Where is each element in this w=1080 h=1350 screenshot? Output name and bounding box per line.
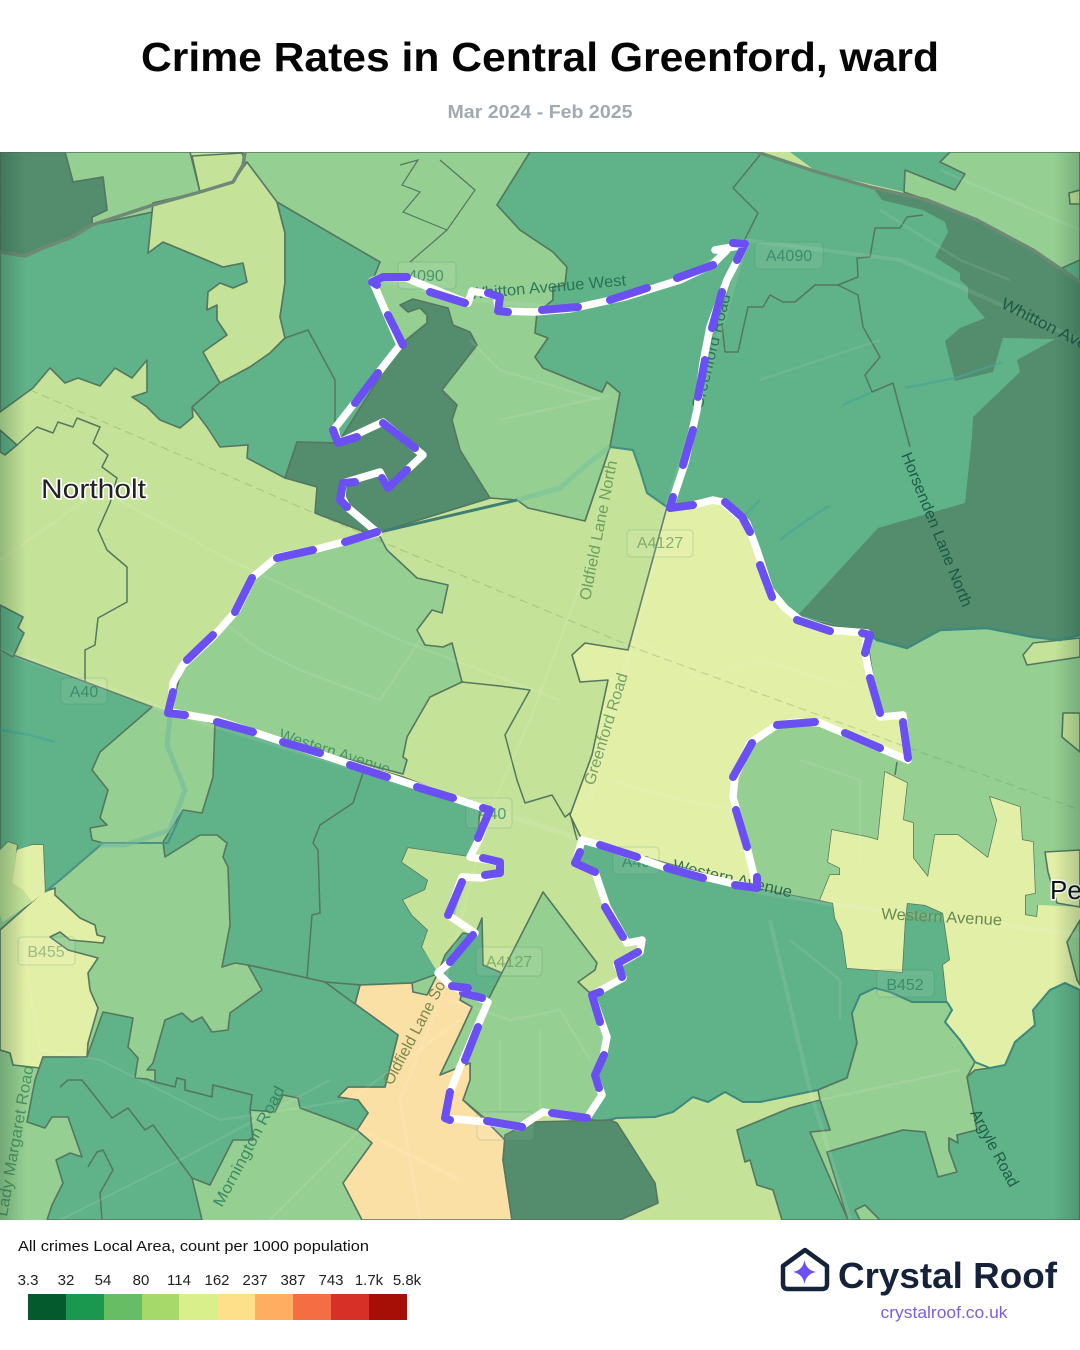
area: mid green lower-left [27,1012,253,1220]
streams [0,362,1003,742]
road labels: Horsenden Lane North [897,450,975,609]
river along the south-east [600,1013,857,1122]
area: light green south-east [810,988,977,1220]
label: A40 east [613,847,659,874]
label: B452 [877,970,934,997]
road labels: Argyle Road [966,1107,1021,1190]
area: light green west of Greenford, inside ward [170,533,462,774]
label: A4127 north: A4127 [637,535,683,552]
area: pale yellow Perivale east [1045,850,1080,907]
legend values [18,1272,422,1289]
area: north-west light green [65,152,200,225]
area: A40 south-west mid green [0,678,460,1220]
brand logo [783,1250,1058,1322]
place label: Northolt: Northolt [41,474,147,504]
area: pale yellow B455 [0,888,105,1068]
road labels [0,272,1080,1218]
area: left mid green south of A40 [0,650,152,892]
area: top-right light green [903,152,1080,268]
label: A4090 west: 4090 [408,268,444,285]
north-west canal edge [45,810,183,892]
area: north-east mid green [497,152,1080,648]
road labels: Greenford Road [582,671,632,787]
area: north mid green, west of ward [192,202,403,478]
area: mid green south-east corner [827,983,1080,1220]
area: top yellow patch [192,153,245,192]
legend colour ramp [28,1294,407,1320]
area: small green wedge at right edge [1062,260,1080,282]
label: A4127 south: A4127 [486,954,532,971]
label: A40 centre [466,798,512,828]
river north of Perivale [867,628,1080,648]
choropleth map [0,152,1080,1220]
label: A40 centre: A40 [478,806,506,823]
area: orange town centre [338,973,512,1220]
area: darkest north-east park [798,188,1080,648]
legend values: 237 [242,1272,268,1289]
label: A4127 south [476,947,542,976]
website: crystalroof.co.uk [880,1304,1008,1322]
area: small yellow top-right [1069,190,1080,204]
road labels: Mornington Road [211,1084,288,1210]
area: yellow-green strip at east [1023,638,1080,665]
label: A40 west: A40 [70,684,98,701]
canal [100,715,185,845]
ward boundary: white base [170,245,908,1127]
area: top right band [790,152,965,192]
ward boundary: purple dashes [168,243,908,1127]
icon: house with sparkle [783,1250,827,1289]
edge vignette [0,152,1080,1220]
area: north-west mid green [0,212,247,428]
area: light green sliver at east edge [1067,920,1080,985]
railway line [30,390,1080,810]
area: darkest south [503,1120,658,1220]
area: north-west yellow-green [148,162,285,383]
river on the east side [945,983,1080,1068]
legend values: 162 [204,1272,230,1289]
wordmark: Crystal Roof [838,1255,1058,1296]
label: A4090 east: A4090 [766,248,812,265]
label: A40 west [61,678,107,704]
area: small green by A4127 [438,918,502,1002]
lines: north-east ward boundaries [380,155,923,650]
label: A4090 west [398,262,456,289]
area: east light green [733,628,1080,917]
label: B455: B455 [27,944,65,961]
road labels: Oldfield Lane So [381,978,450,1088]
area: pale yellow top left [12,845,45,902]
label: A4090 east [755,242,823,269]
road labels: Western Avenue [881,906,1003,929]
label: B452: B452 [886,977,924,994]
legend values: 32 [58,1272,74,1289]
line: central ward boundary [462,682,577,840]
road labels: Western Avenue [277,727,392,779]
legend values: 743 [318,1272,344,1289]
legend values: 5.8k [393,1272,422,1289]
area: dark green ward north [285,299,490,533]
legend values: 114 [167,1272,191,1289]
legend values: 54 [95,1272,111,1289]
area: small green at west edge [0,430,17,455]
legend [18,1238,422,1320]
road labels: Western Avenue [671,857,794,901]
legend values: 387 [280,1272,306,1289]
area: east large mid green [575,840,950,1122]
road labels: Oldfield Lane North [577,459,621,602]
area: mid green south of Western Avenue [163,723,480,985]
area: mid green south-west band [147,965,398,1130]
label: B road south [477,1112,534,1140]
area: pale yellow Perivale [820,772,1080,1068]
legend values: 3.3 [18,1272,38,1289]
area: north light green [190,152,620,532]
area: central pale yellow [570,498,908,888]
road network [0,170,1080,1220]
legend values: 1.7k [355,1272,384,1289]
legend values: 80 [133,1272,149,1289]
area: darkest north-west corner [0,152,107,256]
title: Crime Rates in Central Greenford, ward [141,34,939,80]
road shield labels [18,242,934,1140]
line: Northolt internal boundary [17,418,127,683]
area: mid green south central [737,1100,848,1220]
label: A40 east: A40 [622,854,650,871]
road labels: Greenford Road [689,292,734,411]
area: yellow-green west of ward [402,848,469,970]
road labels: Whitton Avenue West [469,272,627,303]
legend title: All crimes Local Area, count per 1000 population [18,1238,369,1255]
subtitle: date range: Mar 2024 - Feb 2025 [448,102,632,122]
label: A4127 north [627,530,693,557]
road labels: Whitton Ave [998,295,1080,354]
thick road boundaries [0,152,1080,282]
label: B455 [18,937,75,965]
area: light green south ward [440,892,607,1140]
